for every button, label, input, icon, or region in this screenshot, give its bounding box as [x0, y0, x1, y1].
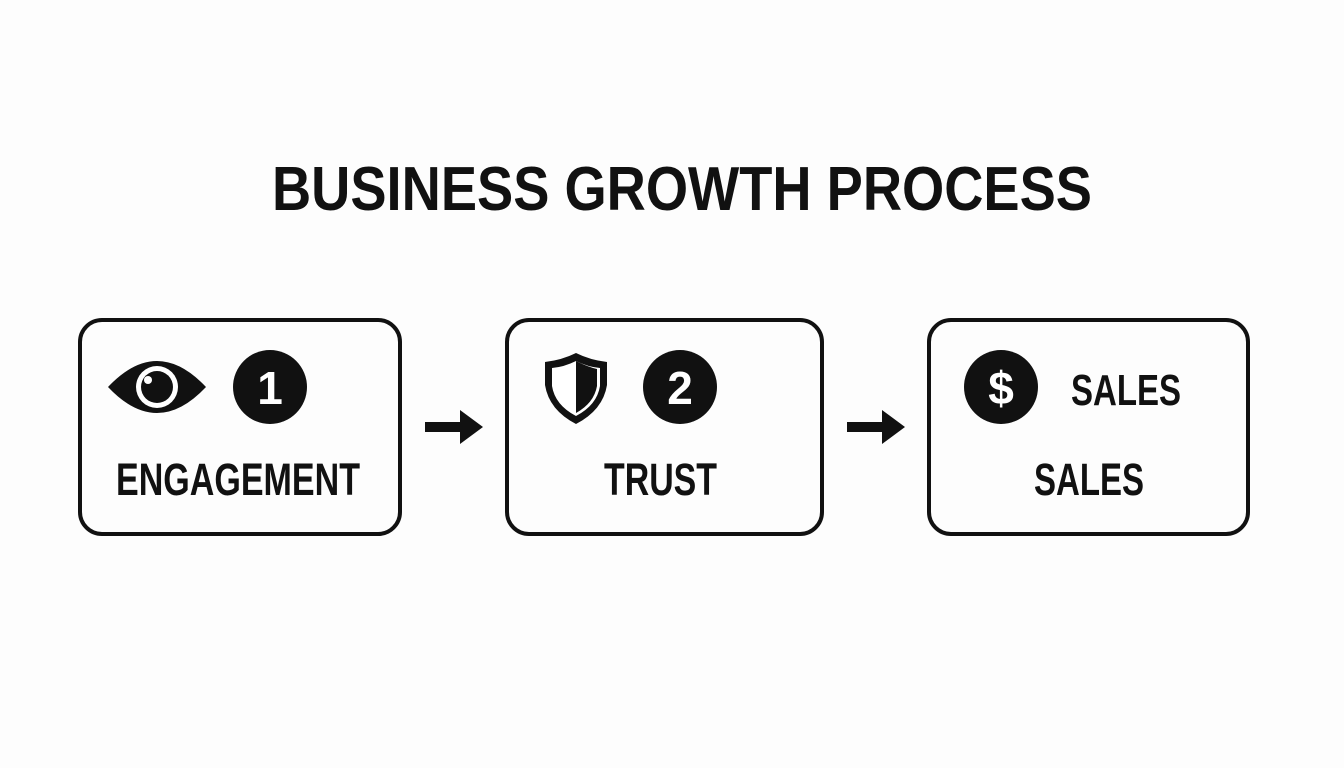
arrow 2 — [847, 410, 905, 444]
arrow 1 — [425, 410, 483, 444]
badge: 2 — [643, 350, 717, 424]
icon: eye — [108, 361, 206, 413]
panel: trust — [507, 320, 822, 534]
heading: sales: SALES — [1071, 366, 1181, 415]
label: sales: SALES — [1034, 454, 1144, 505]
panel: engagement — [80, 320, 400, 534]
badge: 1 — [233, 350, 307, 424]
icon: dollar: $ — [988, 362, 1014, 414]
panel: sales — [929, 320, 1248, 534]
icon: shield — [545, 353, 607, 424]
label: engagement: ENGAGEMENT — [116, 454, 360, 505]
badge: 1: 1 — [257, 362, 283, 414]
label: trust: TRUST — [604, 454, 717, 505]
title: BUSINESS GROWTH PROCESS — [272, 155, 1092, 224]
icon: dollar — [964, 350, 1038, 424]
badge: 2: 2 — [667, 362, 693, 414]
